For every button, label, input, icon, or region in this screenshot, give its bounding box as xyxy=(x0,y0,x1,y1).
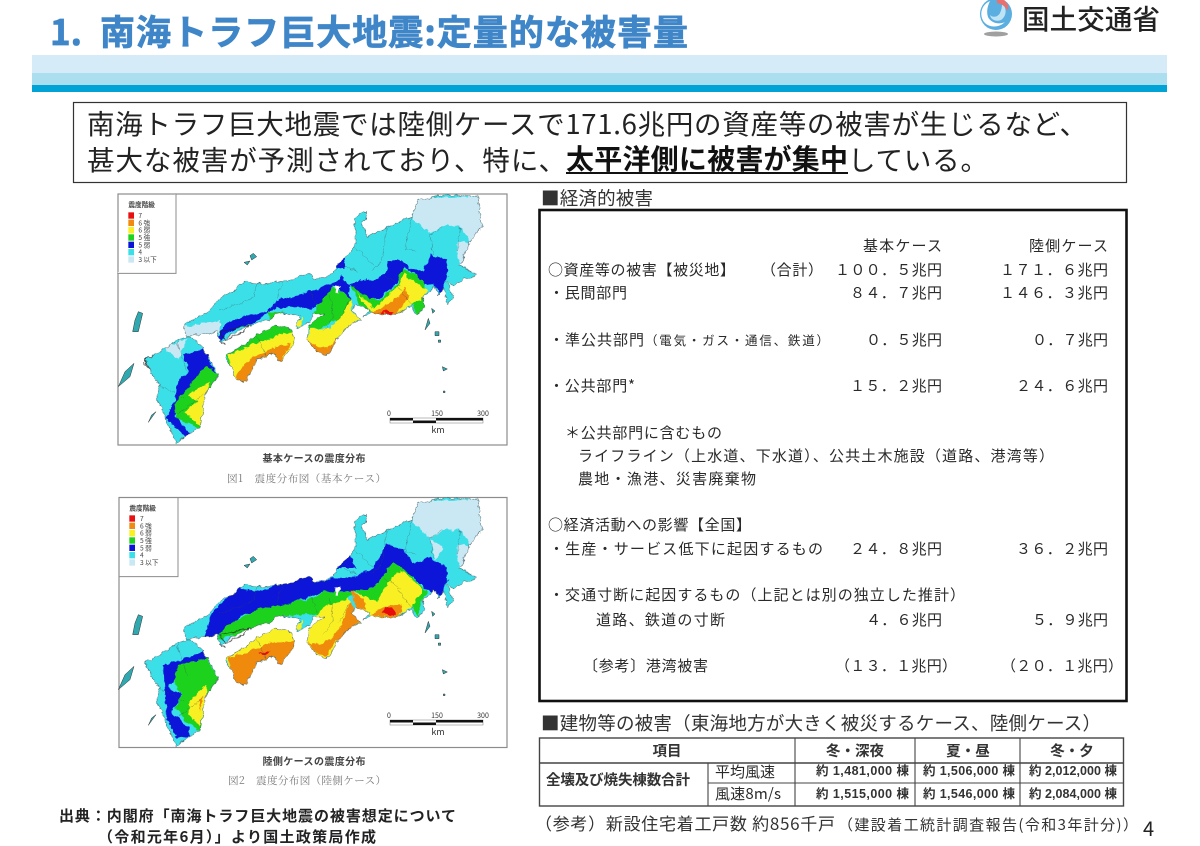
row: average wind speed: 平均風速 xyxy=(715,761,775,782)
heading: economic damage: ■経済的被害 xyxy=(541,185,653,211)
page number: 4 xyxy=(1143,813,1154,842)
row: quasi-public sector xyxy=(549,329,1108,350)
row: economic activity: ○経済活動への影響【全国】 xyxy=(548,514,751,535)
map legend: 6 弱 xyxy=(138,225,151,235)
row: average wind speed: 約 2,012,000 棟 xyxy=(1029,763,1117,778)
panel: economic damage xyxy=(540,210,1126,701)
row: asset damage total: １００．５兆円 xyxy=(835,259,942,280)
map legend: 6 強 xyxy=(138,217,151,227)
row: public sector: １５．２兆円 xyxy=(850,375,942,396)
row: private sector: ８４．７兆円 xyxy=(850,282,942,303)
row: private sector xyxy=(549,282,1108,303)
map legend: 5 弱 xyxy=(140,542,152,552)
row label: 全壊及び焼失棟数合計 xyxy=(546,769,690,790)
row: wind speed 8 m/s: 風速8m/s xyxy=(715,783,781,804)
header band xyxy=(32,55,1167,92)
heading: building damage: ■建物等の被害（東海地方が大きく被災するケース、陸側ケース） xyxy=(541,710,1101,736)
row: asset damage total: １７１．６兆円 xyxy=(1000,259,1108,280)
map legend: 7 xyxy=(140,513,144,523)
row: transport disruption xyxy=(549,584,1108,630)
row: quasi-public sector: ０．７兆円 xyxy=(1032,329,1108,350)
row: average wind speed: 約 1,481,000 棟 xyxy=(816,763,909,778)
note: public sector contents: ライフライン（上水道、下水道）、公共土木施設（道路、港湾等） xyxy=(578,445,1054,466)
note: public sector contents: 農地・漁港、災害廃棄物 xyxy=(578,468,756,489)
row: port damage reference: （１３．１兆円） xyxy=(835,655,957,676)
table header row: 項目 xyxy=(652,740,682,761)
reference note: （建設着工統計調査報告(令和3年計分)） xyxy=(838,814,1138,835)
table header row: 冬・深夜 xyxy=(826,740,884,761)
column headers: 陸側ケース xyxy=(1029,235,1108,256)
map scale bar: 0 xyxy=(387,711,391,721)
map legend: 5 弱 xyxy=(138,239,151,249)
figure caption: 図1 震度分布図（基本ケース） xyxy=(227,471,386,486)
row: quasi-public sector: （電気・ガス・通信、鉄道） xyxy=(645,330,829,349)
row: port damage reference xyxy=(583,655,1123,676)
map legend: 震度階級 xyxy=(129,503,156,513)
row: economic activity: ・生産・サービス低下に起因するもの xyxy=(549,538,823,559)
map legend: 6 強 xyxy=(140,520,152,530)
map caption: 基本ケースの震度分布 xyxy=(262,450,366,465)
map scale bar: 150 xyxy=(431,711,443,721)
row: average wind speed xyxy=(715,761,1117,782)
row: private sector: １４６．３兆円 xyxy=(1000,282,1108,303)
row: wind speed 8 m/s: 約 2,084,000 棟 xyxy=(1029,786,1117,801)
figure caption: 図2 震度分布図（陸側ケース） xyxy=(228,773,386,788)
map legend: 3 以下 xyxy=(140,557,159,567)
map land shading xyxy=(118,497,484,748)
row: average wind speed: 約 1,506,000 棟 xyxy=(923,763,1015,778)
row: private sector: ・民間部門 xyxy=(549,282,627,303)
map scale bar: km xyxy=(431,423,445,436)
summary callout box: 甚大な被害が予測されており、特に、 xyxy=(87,138,566,178)
source note xyxy=(59,805,456,846)
note: public sector contents: ＊公共部門に含むもの xyxy=(565,422,722,443)
reference note: （参考）新設住宅着工戸数 約856千戸 xyxy=(535,810,835,835)
row: public sector: ２４．６兆円 xyxy=(1016,375,1108,396)
row: port damage reference: （２０．１兆円） xyxy=(1001,655,1123,676)
map legend: 4 xyxy=(138,247,142,257)
summary callout box: 太平洋側に被害が集中 xyxy=(566,138,848,178)
row: asset damage total: （合計） xyxy=(761,259,823,280)
row: economic activity: ３６．２兆円 xyxy=(1016,538,1108,559)
map legend: 4 xyxy=(140,550,144,560)
map: land-side case seismic intensity xyxy=(110,488,520,788)
map land shading xyxy=(118,194,484,444)
row: economic activity: ２４．８兆円 xyxy=(850,538,942,559)
map legend: 7 xyxy=(138,210,142,220)
map scale bar: 150 xyxy=(431,409,443,419)
row: quasi-public sector: ・準公共部門 xyxy=(549,329,644,350)
row: transport disruption: ５．９兆円 xyxy=(1032,609,1108,630)
row: asset damage total: ○資産等の被害【被災地】 xyxy=(548,259,735,280)
title: 1. xyxy=(50,5,82,56)
map legend: 震度階級 xyxy=(128,199,155,209)
row: port damage reference: 〔参考〕港湾被害 xyxy=(583,655,708,676)
map legend: 6 弱 xyxy=(140,528,152,538)
row: wind speed 8 m/s: 約 1,546,000 棟 xyxy=(923,786,1015,801)
table header row: 夏・昼 xyxy=(946,740,990,761)
row: asset damage total xyxy=(548,259,1108,280)
map scale bar: km xyxy=(431,725,445,738)
row: economic activity xyxy=(548,514,1108,559)
map legend: 3 以下 xyxy=(138,254,157,264)
row: quasi-public sector: ０．５兆円 xyxy=(866,329,942,350)
row: transport disruption: 道路、鉄道の寸断 xyxy=(596,609,725,630)
row: public sector: ・公共部門* xyxy=(549,375,635,396)
note: public sector contents xyxy=(565,422,1054,489)
reference note xyxy=(535,810,1138,835)
title: 南海トラフ巨大地震:定量的な被害量 xyxy=(100,5,688,56)
row: wind speed 8 m/s: 約 1,515,000 棟 xyxy=(816,786,909,801)
summary callout box xyxy=(74,102,1126,182)
column headers xyxy=(863,235,1108,256)
logo: MLIT xyxy=(980,0,1160,37)
map caption: 陸側ケースの震度分布 xyxy=(262,753,366,768)
source note: 出典：内閣府「南海トラフ巨大地震の被害想定について xyxy=(59,805,456,826)
map legend: 5 強 xyxy=(140,535,152,545)
map legend: 5 強 xyxy=(138,232,151,242)
map scale bar: 300 xyxy=(477,409,489,419)
table: building damage xyxy=(539,738,1124,806)
table header row: 冬・夕 xyxy=(1050,740,1094,761)
row: public sector xyxy=(549,375,1108,396)
summary callout box: している。 xyxy=(848,138,988,178)
map scale bar: 0 xyxy=(387,409,391,419)
row: transport disruption: ４．６兆円 xyxy=(866,609,942,630)
table header row xyxy=(652,740,1094,761)
map: basic case seismic intensity xyxy=(110,185,520,486)
row: transport disruption: ・交通寸断に起因するもの（上記とは別の独立した推計） xyxy=(549,584,965,605)
map scale bar xyxy=(387,711,489,738)
map scale bar: 300 xyxy=(477,711,489,721)
summary callout box: 南海トラフ巨大地震では陸側ケースで171.6兆円の資産等の被害が生じるなど、 xyxy=(87,102,1087,142)
map legend xyxy=(119,497,178,577)
column headers: 基本ケース xyxy=(863,235,942,256)
map legend xyxy=(117,193,176,273)
table grid xyxy=(539,738,1124,806)
map scale bar xyxy=(387,409,489,436)
row: wind speed 8 m/s xyxy=(715,783,1117,804)
icon: ministry emblem xyxy=(980,0,1012,36)
